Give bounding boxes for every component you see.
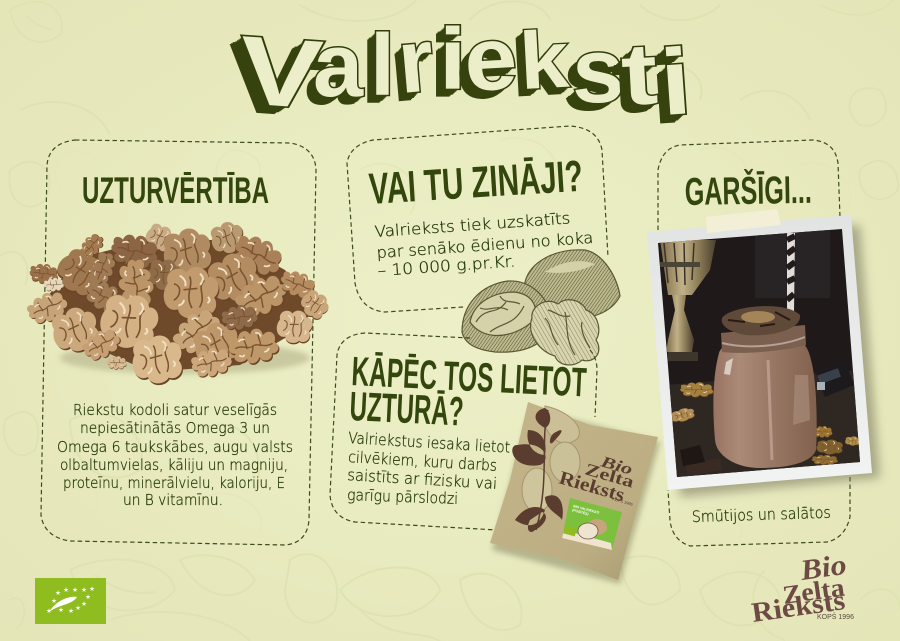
heading: tasty: GARŠĪGI... bbox=[684, 167, 812, 214]
brand logo: Zelta bbox=[781, 573, 846, 610]
panel outline bbox=[330, 333, 597, 530]
EU organic logo: ★ bbox=[85, 593, 91, 601]
panel: why use it bbox=[330, 333, 597, 530]
EU organic logo: ★ bbox=[81, 586, 87, 594]
description text: un B vitamīnu. bbox=[123, 491, 223, 509]
title: Valrieksti: t bbox=[619, 26, 660, 124]
reasons text: cilvēkiem, kuru darbs bbox=[348, 448, 498, 475]
panel: did you know bbox=[347, 126, 620, 365]
product package bbox=[490, 402, 660, 584]
title: Valrieksti: i bbox=[657, 30, 694, 136]
EU organic logo: ★ bbox=[75, 604, 81, 612]
package brand: Zelta bbox=[583, 460, 637, 492]
tape bbox=[706, 209, 781, 233]
heading: why use it: KĀPĒC TOS LIETOT bbox=[351, 348, 588, 405]
package label: (PUSĪTĒS) bbox=[572, 508, 589, 516]
title: Valrieksti: e bbox=[462, 8, 519, 111]
title: Valrieksti: s bbox=[572, 20, 625, 122]
description text: Omega 6 taukskābes, augu valsts bbox=[57, 438, 293, 456]
description text bbox=[57, 401, 293, 509]
brand logo: KOPŠ 1996 bbox=[817, 612, 854, 621]
title: Valrieksti: r bbox=[394, 10, 438, 113]
reasons text: saistīts ar fizisku vai bbox=[347, 466, 498, 493]
package illustration bbox=[512, 406, 580, 532]
panel: nutritional value bbox=[23, 140, 334, 545]
description text: Riekstu kodoli satur veselīgās bbox=[73, 401, 277, 419]
brand logo: Bio bbox=[797, 549, 849, 587]
title: Valrieksti: a bbox=[313, 16, 363, 116]
walnut pile bbox=[23, 219, 334, 387]
caption: Smūtijos un salātos bbox=[692, 504, 831, 526]
package brand bbox=[557, 453, 637, 507]
package brand: KOPŠ 1996 bbox=[612, 496, 634, 507]
EU organic logo: ★ bbox=[51, 597, 57, 605]
fact text: – 10 000 g.pr.Kr. bbox=[377, 252, 516, 280]
title: Valrieksti: i bbox=[439, 11, 467, 108]
EU organic logo: ★ bbox=[63, 586, 69, 594]
EU organic logo bbox=[35, 578, 106, 624]
EU organic logo: ★ bbox=[89, 585, 95, 593]
EU organic logo: ★ bbox=[68, 607, 74, 615]
fact text: Valrieksts tiek uzskatīts bbox=[374, 209, 571, 241]
heading: why use it: UZTURĀ? bbox=[349, 383, 465, 435]
panel: tasty bbox=[647, 140, 880, 546]
title: Valrieksti bbox=[230, 8, 694, 136]
panel outline bbox=[347, 126, 608, 312]
description text: nepiesātinātās Omega 3 un bbox=[80, 419, 270, 437]
title: Valrieksti: l bbox=[370, 17, 395, 114]
heading: did you know: VAI TU ZINĀJI? bbox=[368, 152, 584, 214]
reasons text: garīgu pārslodzi bbox=[347, 486, 458, 508]
EU organic logo: ★ bbox=[72, 586, 78, 594]
panel outline bbox=[41, 140, 316, 545]
title: Valrieksti: V bbox=[236, 17, 326, 130]
description text: olbaltumvielas, kāliju un magniju, bbox=[60, 456, 288, 474]
package label bbox=[562, 498, 622, 550]
EU organic logo: ★ bbox=[55, 589, 61, 597]
package brand: Rieksts bbox=[557, 468, 627, 506]
reasons text bbox=[347, 429, 511, 508]
reasons text: Valriekstus iesaka lietot bbox=[348, 429, 511, 457]
description text: proteīnu, minerālvielu, kaloriju, E bbox=[63, 474, 285, 492]
title: Valrieksti: k bbox=[517, 15, 571, 107]
EU organic logo: ★ bbox=[58, 606, 64, 614]
photo shadow bbox=[660, 225, 880, 497]
package label: BIO VALRIEKSTI bbox=[573, 504, 600, 515]
brand logo: Rieksts bbox=[750, 585, 847, 629]
EU organic logo: ★ bbox=[81, 600, 87, 608]
EU organic logo: ★ bbox=[46, 607, 52, 615]
brand logo bbox=[750, 549, 854, 629]
fact text bbox=[374, 209, 594, 280]
fact text: par senāko ēdienu no koka bbox=[376, 229, 594, 262]
panel outline bbox=[658, 140, 850, 546]
package brand: Bio bbox=[598, 453, 634, 479]
heading: nutritional value: UZTURVĒRTĪBA bbox=[82, 170, 269, 211]
photo bbox=[658, 229, 860, 477]
polaroid photo of smoothie bbox=[647, 215, 872, 490]
illustration: engraved walnut bbox=[462, 250, 620, 365]
heading: why use it bbox=[349, 348, 588, 435]
